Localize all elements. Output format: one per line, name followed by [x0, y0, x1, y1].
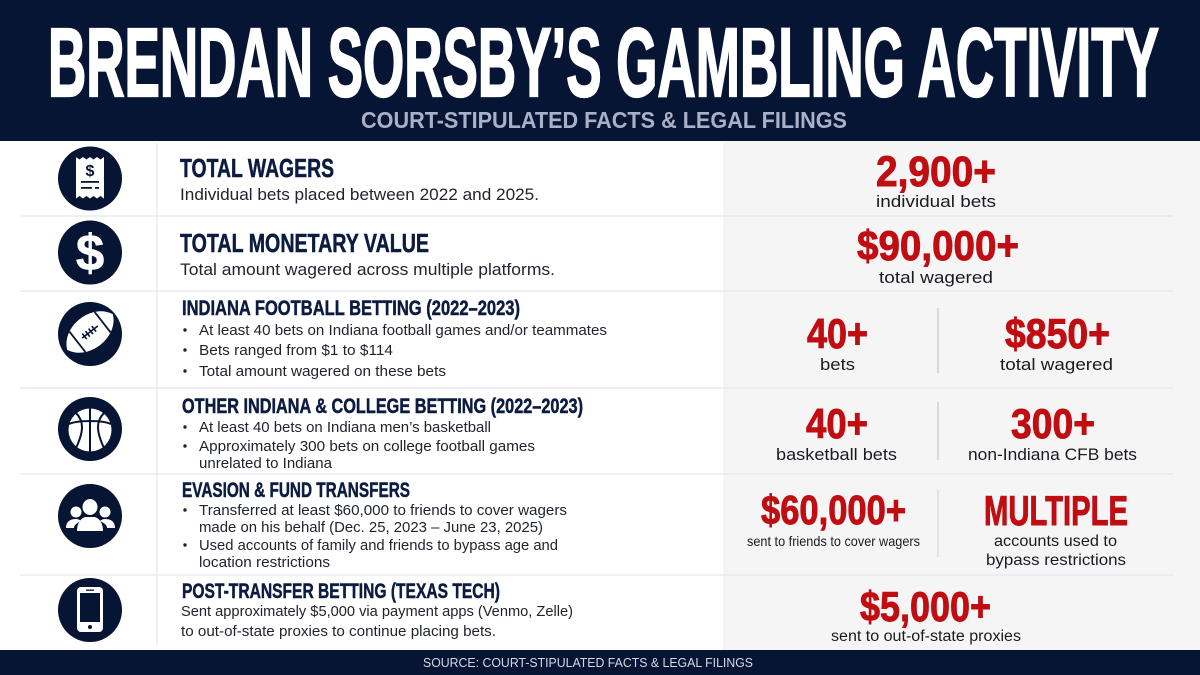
- description: post-transfer betting: to out-of-state proxies to continue placing bets.: [181, 623, 496, 640]
- stat: 300+ non-Indiana CFB bets: [968, 400, 1137, 464]
- row: post-transfer betting: [58, 578, 1021, 645]
- bullet list: other Indiana and college betting: Approximately 300 bets on college football games: [199, 438, 535, 455]
- stat: $60,000+ sent to friends: $60,000+: [761, 487, 906, 533]
- header banner: [0, 0, 1200, 141]
- bullet list: evasion and fund transfers: Used accounts of family and friends to bypass age and: [199, 537, 558, 554]
- stat: $850+ total wagered: total wagered: [1000, 355, 1113, 374]
- bullet list: evasion and fund transfers: location restrictions: [199, 554, 330, 571]
- row: total monetary value: [58, 220, 1019, 287]
- stat: $5,000+ sent to proxies: sent to out-of-state proxies: [831, 628, 1021, 645]
- stat: $850+ total wagered: $850+: [1005, 310, 1110, 357]
- stat: 40+ basketball bets: [776, 400, 897, 464]
- heading: other Indiana and college betting: OTHER INDIANA & COLLEGE BETTING (2022–2023): [182, 395, 583, 418]
- stat: 2,900+ individual bets: individual bets: [876, 192, 996, 211]
- bullet list: evasion and fund transfers: [183, 502, 567, 571]
- stat: $60,000+ sent to friends: [747, 487, 920, 549]
- stat: multiple accounts: MULTIPLE: [984, 487, 1128, 534]
- bullet list: other Indiana and college betting: At least 40 bets on Indiana men’s basketball: [199, 419, 491, 436]
- icon: football: [57, 301, 123, 366]
- stat: $60,000+ sent to friends: sent to friends to cover wagers: [747, 533, 920, 549]
- icon: basketball: [58, 397, 122, 461]
- heading: total monetary value: TOTAL MONETARY VALUE: [180, 228, 429, 258]
- description: post-transfer betting: Sent approximately $5,000 via payment apps (Venmo, Zelle): [181, 603, 573, 620]
- stat: 40+ bets: [807, 310, 868, 374]
- stat: 40+ basketball bets: basketball bets: [776, 445, 897, 464]
- stat: multiple accounts: accounts used to: [994, 533, 1117, 550]
- stat: $90,000+ total wagered: total wagered: [879, 268, 993, 287]
- stat: 40+ bets: bets: [820, 355, 855, 374]
- stat: 300+ non-Indiana CFB bets: 300+: [1011, 400, 1095, 447]
- bullet list: Indiana football betting: At least 40 bets on Indiana football games and/or teammates: [199, 322, 607, 339]
- stat: 300+ non-Indiana CFB bets: non-Indiana CFB bets: [968, 445, 1137, 464]
- heading: evasion and fund transfers: EVASION & FUND TRANSFERS: [182, 479, 410, 502]
- stat: $5,000+ sent to proxies: $5,000+: [860, 583, 991, 630]
- row: total wagers: [58, 146, 996, 211]
- icon: dollar sign: [58, 220, 122, 284]
- bullet list: Indiana football betting: Bets ranged from $1 to $114: [199, 342, 393, 359]
- footer: source: SOURCE: COURT-STIPULATED FACTS & LEGAL FILINGS: [423, 656, 753, 670]
- icon: dollar sign: $: [76, 224, 104, 281]
- bullet list: other Indiana and college betting: unrelated to Indiana: [199, 455, 333, 472]
- bullet list: Indiana football betting: [183, 322, 607, 380]
- stat: $850+ total wagered: [1000, 310, 1113, 374]
- stat: multiple accounts: [984, 487, 1128, 569]
- icon: smartphone: [58, 578, 122, 642]
- bullet list: other Indiana and college betting: [183, 419, 535, 472]
- icon: group of people: [58, 484, 122, 548]
- description: total monetary value: Total amount wagered across multiple platforms.: [180, 260, 555, 279]
- stat: 40+ bets: 40+: [807, 310, 868, 357]
- bullet list: evasion and fund transfers: Transferred at least $60,000 to friends to cover wagers: [199, 502, 567, 519]
- row: other Indiana and college betting: [58, 395, 1137, 472]
- stat: $90,000+ total wagered: $90,000+: [857, 222, 1019, 269]
- icon: receipt: $: [86, 163, 95, 180]
- description: total wagers: Individual bets placed between 2022 and 2025.: [180, 185, 539, 204]
- bullet list: Indiana football betting: Total amount wagered on these bets: [199, 363, 446, 380]
- stat: $5,000+ sent to proxies: [831, 583, 1021, 645]
- heading: total wagers: TOTAL WAGERS: [180, 153, 334, 183]
- heading: post-transfer betting: POST-TRANSFER BETTING (TEXAS TECH): [182, 580, 500, 603]
- stat: 2,900+ individual bets: 2,900+: [876, 148, 996, 196]
- icon: receipt: [58, 146, 122, 210]
- bullet list: evasion and fund transfers: made on his behalf (Dec. 25, 2023 – June 23, 2025): [199, 519, 543, 536]
- stat: multiple accounts: bypass restrictions: [986, 552, 1126, 569]
- stat: $90,000+ total wagered: [857, 222, 1019, 287]
- row: evasion and fund transfers: [58, 479, 1128, 571]
- row: Indiana football betting: [57, 297, 1113, 380]
- subtitle: COURT-STIPULATED FACTS & LEGAL FILINGS: [361, 107, 847, 133]
- footer: source: [0, 650, 1200, 675]
- description: post-transfer betting: [181, 603, 573, 640]
- heading: Indiana football betting: INDIANA FOOTBALL BETTING (2022–2023): [182, 297, 520, 320]
- stat: 40+ basketball bets: 40+: [806, 400, 868, 447]
